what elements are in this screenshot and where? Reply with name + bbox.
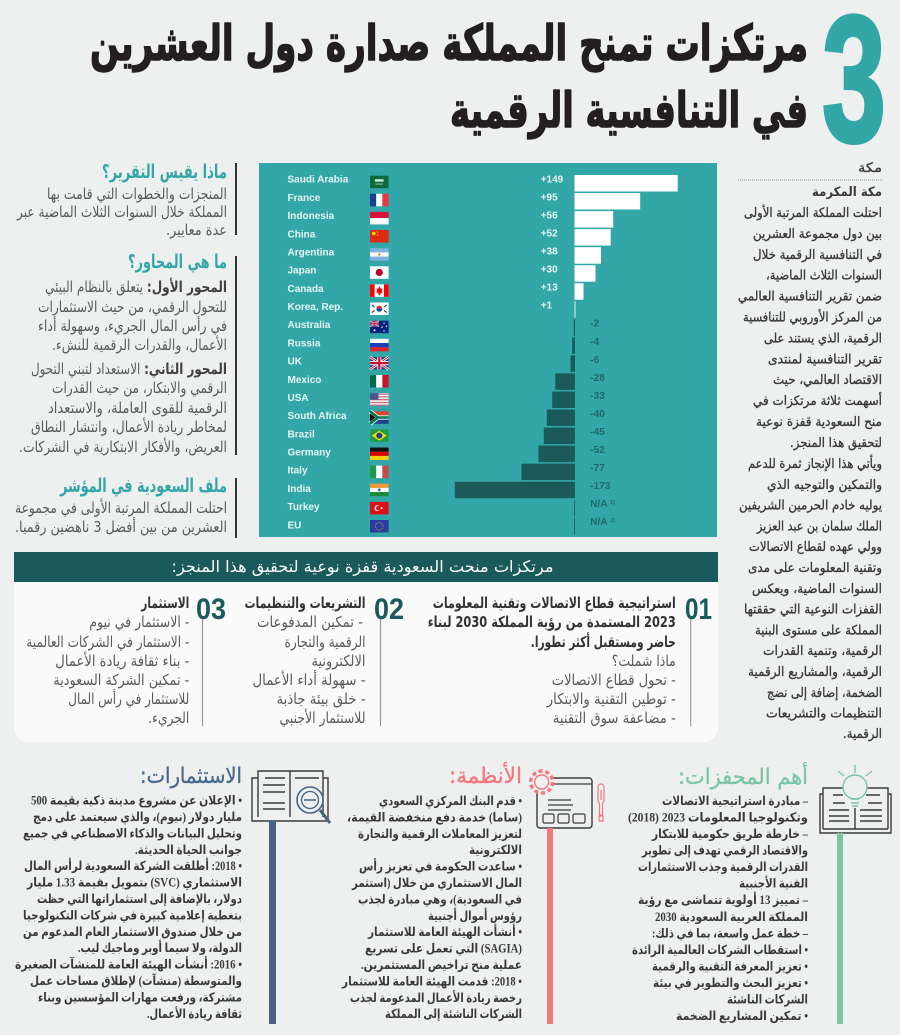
country labels: Canada xyxy=(288,284,324,295)
section: what are the axes: العريض، والأفكار الابتكارية في الشركات. xyxy=(19,437,227,457)
pillar 03: للاستثمار في رأس المال xyxy=(68,689,189,709)
incentives list: والاقتصاد الرقمي تهدف إلى تطوير xyxy=(641,844,808,858)
positive values: +95 xyxy=(541,192,558,204)
dateline: مكة المكرمة xyxy=(812,185,882,200)
country labels: Germany xyxy=(288,448,331,459)
article paragraph 1: تقرير التنافسية لمنتدى xyxy=(768,352,882,367)
pillar 02: - خلق بيئة جاذبة xyxy=(276,690,366,708)
article paragraph 2: الضخمة، إضافة إلى نضج xyxy=(767,686,882,701)
article paragraph 2: القفزات النوعية التي حققتها xyxy=(744,603,882,618)
regulations list xyxy=(341,794,522,1021)
country labels: Australia xyxy=(288,320,331,331)
icon: flag Australia xyxy=(370,321,389,333)
regulations list: عملية منح تراخيص المستثمرين. xyxy=(361,958,522,972)
country labels: China xyxy=(288,229,316,240)
pillar 01: حاضر ومستقبل أكثر تطورا. xyxy=(531,632,676,651)
article paragraph 1: الاقتصاد العالمي، حيث xyxy=(773,373,882,388)
pillar 03: - بناء ثقافة ريادة الأعمال xyxy=(55,651,189,670)
pillar 01 xyxy=(428,593,712,727)
article paragraph 1: من المركز الأوروبي للتنافسية xyxy=(743,308,882,326)
incentives list: المملكة العربية السعودية 2030 xyxy=(655,910,808,924)
panel: investments xyxy=(15,764,330,1024)
heading regulations: الأنظمة: xyxy=(449,762,522,789)
article paragraph 1: احتلت المملكة المرتبة الأولى xyxy=(744,204,882,221)
investments list xyxy=(15,794,242,1021)
article paragraph 1: الرقمية، الذي يستند على xyxy=(764,331,882,346)
incentives list: • تعزيز المعرفة التقنية والرقمية xyxy=(652,959,808,973)
negative bars xyxy=(455,319,575,534)
icon: flag USA xyxy=(370,393,389,406)
negative values: 2) xyxy=(610,518,615,524)
article paragraph 2: الرقمية. xyxy=(843,727,882,742)
incentives list: – مبادرة استراتيجية الاتصالات xyxy=(662,794,809,808)
section: what are the axes: لمخاطر ريادة الأعمال، وانتشار النطاق xyxy=(31,417,227,436)
pillar 02: - سهولة أداء الأعمال xyxy=(252,670,366,689)
icon: flag South Africa xyxy=(370,411,389,424)
panel: incentives xyxy=(628,762,891,1024)
country labels: Mexico xyxy=(288,375,321,386)
article paragraph 2: وولي عهده لقطاع الاتصالات xyxy=(749,540,882,555)
pillar 03: الاستثمار xyxy=(141,594,189,612)
article paragraph 2: والتمكين والتوجيه الذي xyxy=(767,478,882,493)
incentives list: • تعزيز البحث والتطوير في بيئة xyxy=(653,976,808,990)
article paragraph 2: المملكة على مستوى البنية xyxy=(755,623,882,638)
panel: left sidebar xyxy=(15,161,237,538)
incentives list xyxy=(628,794,809,1023)
icon: open book with light bulb xyxy=(820,765,891,833)
investments list: ثقافة ريادة الأعمال. xyxy=(147,1006,242,1021)
pillar 03: - تمكين الشركة السعودية xyxy=(53,671,189,689)
article paragraph 2: يوليه خادم الحرمين الشريفين xyxy=(739,499,882,514)
incentives list: الفنية الأجنبية xyxy=(739,876,808,891)
heading incentives: أهم المحفزات: xyxy=(678,762,808,790)
section: what are the axes: الرقمي والابتكار، من حيث القدرات xyxy=(52,379,227,398)
investments list: • 2016: أنشأت الهيئة العامة للمنشآت الصغيرة xyxy=(15,956,242,972)
pillar 02 xyxy=(244,593,404,728)
incentives list: – تمييز 13 أولوية تتماشى مع رؤية xyxy=(638,891,809,907)
regulations list: في السعودية)، وهي مبادرة لجذب xyxy=(358,892,522,906)
regulations list: رؤوس أموال أجنبية xyxy=(428,907,522,923)
article paragraph 1 xyxy=(738,204,882,451)
negative values: -45 xyxy=(590,427,605,438)
pillar 02: الالكترونية xyxy=(312,652,366,670)
icon: flag France xyxy=(370,194,389,206)
article paragraph 2: السنوات الماضية، ويعكس xyxy=(752,582,882,597)
country labels: Indonesia xyxy=(288,211,335,222)
positive bars xyxy=(574,175,678,318)
section: what are the axes: الرقمية للقوى العاملة، والاستعداد xyxy=(48,399,227,417)
country labels: EU xyxy=(288,520,301,531)
article paragraph 2: التنظيمات والتشريعات xyxy=(766,707,882,722)
article paragraph 1: السنوات الثلاث الماضية، xyxy=(766,269,882,284)
country labels: Italy xyxy=(288,466,308,477)
section: what does the report measure: عدة معايير. xyxy=(166,221,227,239)
investments list: جوانب الحياة الحديثة. xyxy=(135,843,242,857)
heading investments: الاستثمارات: xyxy=(140,764,242,789)
pillar 03 xyxy=(26,593,226,728)
icon: flag Germany xyxy=(370,448,389,460)
country labels: UK xyxy=(288,357,303,368)
icon: flag UK xyxy=(370,357,389,369)
regulations list: (ساما) خدمة دفع منخفضة القيمة، xyxy=(347,810,522,824)
section: Saudi profile in the index: احتلت المملكة المرتبة الأولى في مجموعة xyxy=(15,498,227,518)
icon: flag Mexico xyxy=(370,375,389,388)
section: what are the axes: في رأس المال الجريء، وسهولة أداء xyxy=(38,316,227,336)
negative values: 1) xyxy=(610,500,615,506)
section: what does the report measure: ماذا يقيس التقرير؟ xyxy=(102,161,227,183)
pillars header bar: مرتكزات منحت السعودية قفزة نوعية لتحقيق هذا المنجز: xyxy=(172,557,554,577)
pillar 01: استراتيجية قطاع الاتصالات وتقنية المعلومات xyxy=(433,594,676,612)
investments list: والمتوسطة (منشآت) لإطلاق مساحات عمل xyxy=(30,973,242,988)
country labels: France xyxy=(288,193,321,204)
regulations list: • 2018: قدمت الهيئة العامة للاستثمار xyxy=(341,974,522,988)
article paragraph 1: ضمن تقرير التنافسية العالمي xyxy=(738,290,882,305)
pillars header bar xyxy=(14,552,718,582)
article paragraph 1: منح السعودية قفزة نوعية xyxy=(756,415,882,430)
country labels: Argentina xyxy=(288,248,335,258)
section: what does the report measure: المملكة خلال السنوات الثلاث الماضية عبر xyxy=(16,203,227,221)
negative values xyxy=(590,319,615,528)
positive values: +30 xyxy=(541,265,558,276)
icon: window, gear and screwdriver xyxy=(531,771,604,828)
panel: right article column xyxy=(738,161,883,742)
incentives list: • تمكين المشاريع الضخمة xyxy=(676,1009,808,1023)
icon: flag Russia xyxy=(370,339,389,351)
pillar 02: التشريعات والتنظيمات xyxy=(244,594,366,612)
section: Saudi profile in the index: العشرين من بين أفضل 3 ناهضين رقميا. xyxy=(15,517,227,536)
positive values: +149 xyxy=(541,174,564,186)
panel: ranking bar chart xyxy=(259,163,717,537)
country labels: Japan xyxy=(288,266,316,277)
icon: flag Canada xyxy=(370,284,389,297)
negative values: -77 xyxy=(590,463,605,474)
icon: flag Saudi Arabia xyxy=(370,176,389,188)
regulations list: • قدم البنك المركزي السعودي xyxy=(379,794,522,809)
country labels: USA xyxy=(288,393,309,404)
investments list: بتغطية إعلامية كبيرة في شركات التكنولوجيا xyxy=(23,908,242,922)
panel: pillars xyxy=(14,552,718,742)
positive values: +1 xyxy=(541,301,553,312)
icon: flag Turkey xyxy=(370,502,389,514)
investments list: • 2018: أطلقت الشركة السعودية لرأس المال xyxy=(24,857,242,873)
negative values: -2 xyxy=(590,319,600,330)
regulations list: المال الاستثماري من خلال (استثمر xyxy=(351,876,522,890)
country labels: Brazil xyxy=(288,429,315,440)
negative values: -28 xyxy=(590,373,605,384)
title block xyxy=(90,0,886,180)
panel: regulations xyxy=(341,762,604,1024)
pillar 03: الجريء. xyxy=(148,709,189,728)
icon: document with magnifier xyxy=(252,771,330,823)
section: Saudi profile in the index xyxy=(15,475,237,538)
article paragraph 2: الرقمية، والمشاريع الرقمية xyxy=(748,665,882,680)
pillar 03: - الاستثمار في الشركات العالمية xyxy=(26,633,189,652)
flags xyxy=(370,176,389,532)
pillar 01: 2023 المستمدة من رؤية المملكة 2030 لبناء xyxy=(428,613,676,631)
section: what are the axes: المحور الأول: يتعلق بالنظام البيئي xyxy=(45,278,227,297)
positive values xyxy=(541,174,564,312)
positive values: +52 xyxy=(541,229,558,240)
article paragraph 2: ويأتي هذا الإنجاز ثمرة للدعم xyxy=(748,454,882,472)
icon: flag India xyxy=(370,484,389,496)
pillar 02: للاستثمار الأجنبي xyxy=(280,708,366,728)
country labels: India xyxy=(288,484,311,495)
incentives list: الشركات الناشئة xyxy=(727,992,808,1006)
icon: flag China xyxy=(370,230,389,242)
negative values: -6 xyxy=(590,355,600,366)
incentives list: • استقطاب الشركات العالمية الرائدة xyxy=(632,943,808,957)
section: what are the axes: المحور الثاني: الاستعداد لتبني التحول xyxy=(31,360,227,379)
article paragraph 1: في التنافسية الرقمية خلال xyxy=(753,248,882,263)
pillar 01: 01 xyxy=(685,593,712,626)
country labels xyxy=(288,175,349,531)
section: what are the axes: الأعمال، والقدرات الرقمية للنشء. xyxy=(52,335,227,354)
icon: flag Italy xyxy=(370,466,389,478)
country labels: Korea, Rep. xyxy=(288,302,343,313)
positive values: +13 xyxy=(541,283,558,294)
article paragraph 2 xyxy=(739,454,882,742)
pillar 01: - مضاعفة سوق التقنية xyxy=(553,709,676,727)
section: what are the axes: للتحول الرقمي، من حيث الاستثمارات xyxy=(38,298,227,317)
pillar 03: 03 xyxy=(196,593,226,626)
icon: flag Japan xyxy=(370,266,389,279)
icon: flag Argentina xyxy=(370,248,389,261)
negative values: N/A xyxy=(590,499,607,510)
incentives list: وتكنولوجيا المعلومات 2023 (2018) xyxy=(628,810,808,824)
pillar 01: ماذا شملت؟ xyxy=(612,652,676,670)
regulations list: (SAGIA) التي تعمل على تسريع xyxy=(365,942,522,956)
icon: flag Brazil xyxy=(370,429,388,442)
section: what does the report measure xyxy=(16,161,237,239)
negative values: -33 xyxy=(590,391,605,402)
positive values: +38 xyxy=(541,247,558,258)
article paragraph 2: الملك سلمان بن عبد العزيز xyxy=(756,519,882,534)
regulations list: • ساعدت الحكومة في تعزيز رأس xyxy=(359,858,522,874)
country labels: Saudi Arabia xyxy=(288,175,349,186)
country labels: Turkey xyxy=(288,502,320,513)
incentives list: – خطة عمل واسعة، بما في ذلك: xyxy=(652,926,809,940)
accent bar green xyxy=(837,833,843,1024)
section: what are the axes: ما هي المحاور؟ xyxy=(128,251,227,273)
negative values: -52 xyxy=(590,445,605,456)
investments list: • الإعلان عن مشروع مدينة ذكية بقيمة 500 xyxy=(31,794,242,808)
investments list: مليار دولار (نيوم)، والذي سيعتمد على دمج xyxy=(33,810,242,825)
country labels: Russia xyxy=(288,338,321,349)
negative values: -173 xyxy=(590,481,611,492)
article paragraph 2: الرقمية، وتنمية القدرات xyxy=(763,644,882,659)
regulations list: • أنشأت الهيئة العامة للاستثمار xyxy=(367,923,522,939)
investments list: من خلال صندوق الاستثمار العام المدعوم من xyxy=(23,925,242,940)
negative values: N/A xyxy=(590,517,607,528)
pillar 03: - الاستثمار في نيوم xyxy=(89,613,189,632)
article paragraph 1: أسهمت ثلاثة مرتكزات في xyxy=(753,392,882,409)
regulations list: الشركات الناشئة إلى المملكة xyxy=(385,1007,522,1021)
pillar 01: - تحول قطاع الاتصالات xyxy=(552,671,676,689)
incentives list: – خارطة طريق حكومية للابتكار xyxy=(651,827,809,841)
investments list: وتحليل البيانات والذكاء الاصطناعي في جميع xyxy=(23,826,242,840)
regulations list: لتعزيز المعاملات الرقمية والتجارة xyxy=(358,827,522,841)
article paragraph 1: لتحقيق هذا المنجز. xyxy=(790,436,882,451)
regulations list: رخصة ريادة الأعمال المدعومة لجذب xyxy=(350,990,522,1005)
regulations list: الالكترونية xyxy=(469,843,522,857)
country labels: South Africa xyxy=(288,411,347,422)
article paragraph 2: وتقنية المعلومات على مدى xyxy=(748,561,882,576)
negative values: -4 xyxy=(590,337,600,348)
investments list: مشتركة، ورفعت مهارات المؤسسين وبناء xyxy=(38,990,242,1004)
accent bar red xyxy=(547,828,553,1024)
pillar 02: 02 xyxy=(374,593,404,626)
icon: flag South Korea xyxy=(370,302,389,315)
positive values: +56 xyxy=(541,211,558,222)
section: Saudi profile in the index: ملف السعودية في المؤشر xyxy=(59,475,227,497)
pillar 02: - تمكين المدفوعات xyxy=(257,613,363,631)
incentives list: القدرات الرقمية وجذب الاستثمارات xyxy=(638,860,808,874)
pillar 02: الرقمية والتجارة xyxy=(284,633,366,651)
article paragraph 1: بين دول مجموعة العشرين xyxy=(753,227,882,242)
section: what does the report measure: المنجزات والخطوات التي قامت بها xyxy=(47,185,227,204)
investments list: الدولة، ولا سيما أوبر وماجيك ليب. xyxy=(78,939,242,955)
section: what are the axes xyxy=(19,251,237,457)
investments list: الاستثماري (SVC) بتمويل بقيمة 1.33 مليار xyxy=(26,876,242,890)
city label: مكة xyxy=(858,161,882,176)
investments list: دولار، بالإضافة إلى استثماراتها التي حظت xyxy=(37,892,242,906)
negative values: -40 xyxy=(590,409,605,420)
icon: flag EU xyxy=(370,520,389,532)
icon: flag Indonesia xyxy=(370,212,389,224)
pillar 01: - توطين التقنية والابتكار xyxy=(546,690,676,708)
accent bar blue xyxy=(269,821,276,1024)
